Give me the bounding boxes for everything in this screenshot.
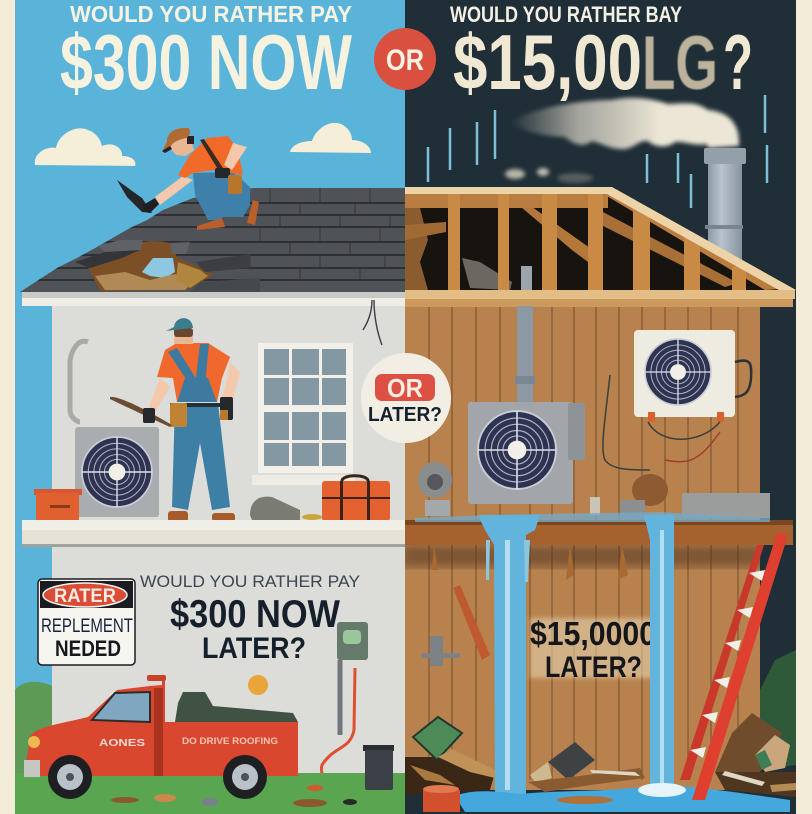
trousers <box>172 403 230 510</box>
right AC unit <box>468 402 585 504</box>
gutter <box>22 292 405 306</box>
left toolbox <box>34 489 82 521</box>
text block: left wall question <box>140 572 360 665</box>
water pool <box>455 783 790 812</box>
overall straps and bib <box>168 344 217 402</box>
debris pile <box>405 713 796 797</box>
grey pipe in attic <box>521 266 532 291</box>
grey fitting <box>250 497 322 520</box>
truck body <box>25 680 298 776</box>
bed text: DO DRIVE ROOFING <box>182 736 278 746</box>
right roof frame <box>405 187 796 307</box>
boots <box>197 218 225 230</box>
red pry bar <box>453 585 490 660</box>
OR / LATER speech bubble <box>361 353 451 443</box>
cab window <box>92 692 150 722</box>
outer rail <box>692 533 788 800</box>
right price headline: $15,00 <box>453 18 642 106</box>
right question line: WOULD YOU RATHER BAY <box>450 2 682 27</box>
right margin edge <box>796 0 812 814</box>
hair <box>174 328 193 337</box>
yellow fitting <box>248 675 268 695</box>
chimney <box>704 148 746 262</box>
question mark: ? <box>723 18 753 106</box>
blurred letters: LG <box>642 21 718 106</box>
far arm <box>224 143 247 170</box>
wall later: LATER? <box>202 632 306 665</box>
dark underlay left <box>405 757 495 795</box>
metal bracket <box>422 636 460 666</box>
wall AC unit <box>634 330 751 422</box>
splash <box>638 783 686 797</box>
rungs <box>690 570 765 758</box>
trousers <box>193 172 250 220</box>
cargo <box>175 692 298 722</box>
tan boards <box>438 749 495 778</box>
warning sign: REPLEMENT <box>41 616 133 637</box>
worker on roof <box>117 128 259 230</box>
wrench <box>110 397 172 427</box>
dark bag <box>548 742 595 780</box>
right shelf <box>405 520 793 545</box>
eave <box>405 290 795 299</box>
shirt <box>178 136 243 178</box>
roof hole <box>75 240 260 292</box>
left AC unit <box>75 427 159 517</box>
pipe collar <box>515 376 535 384</box>
pipe on left wall <box>70 341 88 422</box>
wall planks <box>429 305 738 780</box>
trash can <box>363 745 394 790</box>
bumper <box>24 760 40 777</box>
glove <box>143 198 159 213</box>
door text: AONES <box>99 738 145 749</box>
central wood pile <box>528 768 645 792</box>
badge: OR <box>374 28 436 90</box>
submerged board <box>557 796 613 804</box>
green package <box>413 717 462 760</box>
pouch <box>228 175 242 194</box>
text block: left wall question: WOULD YOU RATHER PAY <box>140 572 360 591</box>
far arm <box>222 362 240 398</box>
right crate <box>715 713 782 772</box>
wheels <box>48 755 92 799</box>
torn shingles <box>75 245 140 268</box>
left question line: WOULD YOU RATHER PAY <box>70 1 352 27</box>
waterfall: left <box>478 515 540 800</box>
eave fascia <box>405 299 793 307</box>
trowel <box>117 180 152 213</box>
OR / LATER speech bubble: OR <box>387 373 423 403</box>
panel: sky background, pay now <box>15 0 405 690</box>
ground <box>15 773 405 814</box>
panel: right wood wall <box>400 300 796 790</box>
window <box>252 343 355 485</box>
icon: right cloud <box>290 123 371 153</box>
heading: left question <box>60 1 352 106</box>
rafters <box>605 195 780 290</box>
panel: left house wall <box>15 300 405 780</box>
text block: right wall cost: $15,0000 <box>530 615 656 652</box>
panel: stormy background, pay later <box>405 0 796 814</box>
left roof <box>20 188 405 292</box>
near arm <box>155 176 193 205</box>
hanging wires <box>363 300 382 345</box>
left price headline: $300 NOW <box>60 18 352 106</box>
green foliage at right <box>760 650 796 770</box>
inner rail <box>680 545 764 780</box>
right toolbox <box>322 476 390 521</box>
drips from shelf <box>432 545 628 580</box>
red box in water <box>423 785 460 812</box>
cables <box>603 375 720 470</box>
wall price: $300 NOW <box>170 593 340 636</box>
cab dividers <box>154 688 163 776</box>
standing worker <box>110 318 240 522</box>
text block: right wall cost <box>530 615 657 684</box>
tree behind wall <box>15 682 52 780</box>
head <box>170 137 194 156</box>
OR / LATER speech bubble: LATER? <box>368 404 442 426</box>
crossbeam <box>405 193 608 208</box>
right wall later: LATER? <box>545 651 642 684</box>
strap <box>200 139 223 171</box>
window sill <box>252 475 355 485</box>
near arm <box>148 378 170 412</box>
cap <box>162 128 190 152</box>
neck <box>174 336 193 344</box>
smoke plume <box>505 98 739 183</box>
shelf clutter <box>415 462 770 522</box>
badge: OR: OR <box>386 44 424 77</box>
rain <box>428 95 767 208</box>
right wood pile <box>715 772 796 797</box>
boots <box>168 511 188 522</box>
back pocket glove <box>220 397 233 420</box>
belt <box>170 403 230 407</box>
warning sign: RATER <box>54 586 116 607</box>
left glove <box>143 408 155 423</box>
heading: right question <box>450 2 753 106</box>
shingles <box>20 188 405 280</box>
belt glove <box>215 168 230 178</box>
red truck <box>24 675 298 799</box>
left ledge <box>22 520 405 547</box>
tool belt pouch <box>170 403 187 427</box>
electrical box and hoses <box>321 622 368 782</box>
warning sign: NEDED <box>55 636 121 661</box>
waterfall: right <box>644 515 674 795</box>
shirt <box>157 343 230 402</box>
leaves on ground <box>111 785 357 807</box>
red ladder <box>680 533 788 800</box>
cap <box>166 318 193 331</box>
interior brace <box>515 202 590 262</box>
attic debris <box>405 198 512 290</box>
headlight <box>28 736 40 748</box>
vent pipe <box>517 306 533 402</box>
pale top edge <box>405 187 796 294</box>
shade under shelf <box>400 545 765 567</box>
studs <box>448 193 746 290</box>
warning sign <box>38 579 135 665</box>
icon: left cloud <box>35 128 135 166</box>
